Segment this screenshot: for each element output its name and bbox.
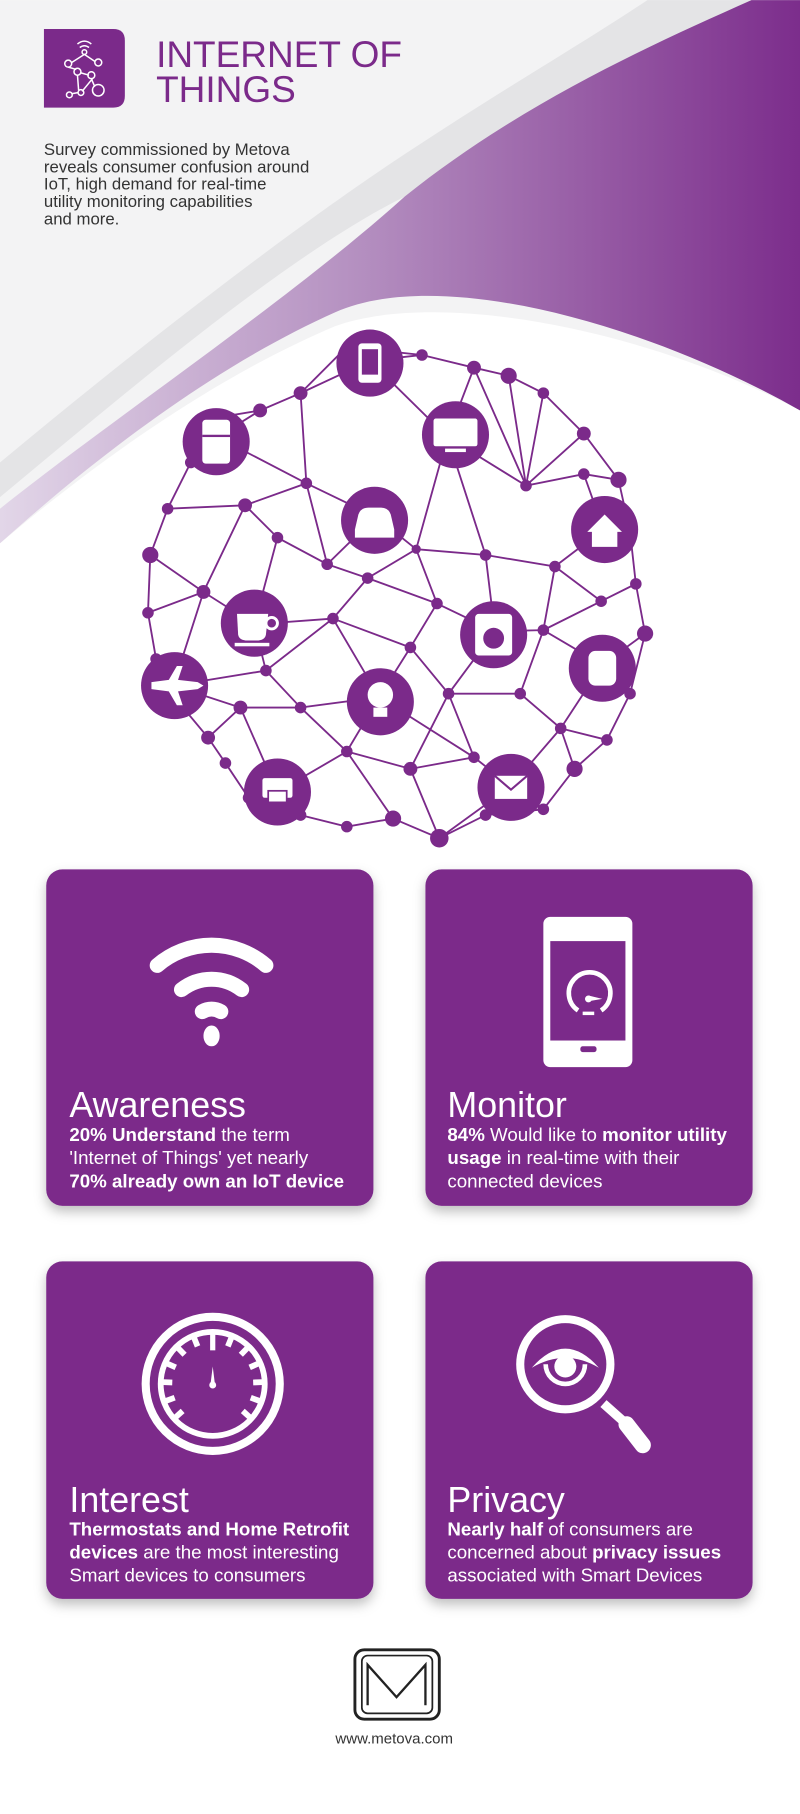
icon: phone gauge [543,917,632,1067]
card: privacy: Privacy [447,1480,565,1520]
card: monitor: usage in real-time with their [447,1147,679,1168]
card: monitor [425,869,753,1206]
card: monitor: connected devices [447,1170,602,1191]
footer url: www.metova.com [334,1730,453,1747]
card: monitor: 84% Would like to monitor utility [447,1124,727,1145]
card: interest [46,1261,373,1599]
icon: wifi [157,945,266,1043]
intro paragraph: Survey commissioned by Metova [44,140,290,159]
header icon [44,29,125,108]
card: monitor: Monitor [447,1085,567,1125]
card: awareness [46,869,373,1206]
card: interest: Smart devices to consumers [69,1565,306,1586]
title: INTERNET OF [156,34,402,75]
intro paragraph: utility monitoring capabilities [44,192,252,211]
intro paragraph: IoT, high demand for real-time [44,175,266,194]
network globe [141,330,653,847]
intro paragraph [44,140,309,228]
card: interest: Thermostats and Home Retrofit [69,1518,349,1539]
card: awareness: Awareness [69,1085,246,1125]
title [156,34,402,110]
card: privacy: associated with Smart Devices [447,1565,702,1586]
icon: magnifier eye [520,1319,643,1445]
card: privacy: concerned about privacy issues [447,1541,721,1562]
card: privacy: Nearly half of consumers are [447,1518,693,1539]
card: interest: Interest [69,1480,189,1520]
card: awareness: 70% already own an IoT device [69,1170,344,1191]
intro paragraph: reveals consumer confusion around [44,157,309,176]
card: awareness: 'Internet of Things' yet nearly [69,1147,309,1168]
intro paragraph: and more. [44,209,119,228]
title: THINGS [156,69,296,110]
card: privacy [425,1261,753,1599]
card: awareness: 20% Understand the term [69,1124,290,1145]
card: interest: devices are the most interesting [69,1541,339,1562]
logo [355,1650,439,1719]
icon: gauge [146,1317,280,1451]
